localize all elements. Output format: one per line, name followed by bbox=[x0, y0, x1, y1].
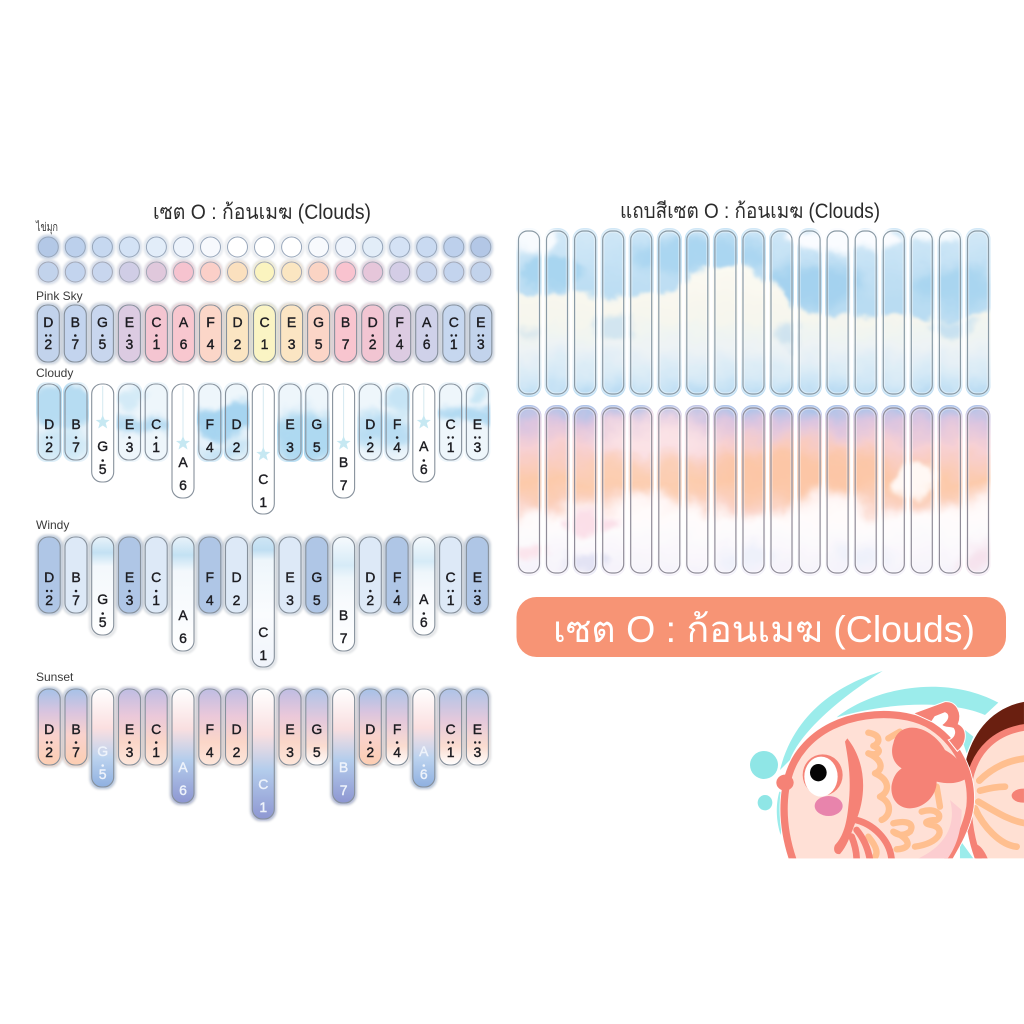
watercolor cloud texture bbox=[36, 382, 490, 462]
row: Sunset stickers: F bbox=[393, 721, 401, 737]
row: Cloudy stickers: C bbox=[151, 416, 161, 432]
illustration: goldfish bbox=[750, 671, 1024, 870]
row: Pink Sky stickers: 3 bbox=[288, 336, 296, 352]
row: Pink Sky stickers: 4 bbox=[207, 336, 215, 352]
row: Sunset stickers: 2 bbox=[366, 744, 374, 760]
row: Windy stickers: 3 bbox=[286, 592, 294, 608]
row: Pink Sky stickers: D bbox=[368, 314, 378, 330]
row: Sunset stickers: D bbox=[231, 721, 242, 737]
row: Pink Sky stickers: 3 bbox=[126, 336, 134, 352]
label: pearl: ไข่มุก bbox=[35, 220, 58, 235]
row: Cloudy stickers: F bbox=[393, 416, 401, 432]
row: Sunset stickers: 1 bbox=[152, 744, 160, 760]
row: Cloudy stickers: D bbox=[231, 416, 242, 432]
row: Cloudy stickers: E bbox=[285, 416, 295, 432]
body bbox=[780, 759, 975, 847]
row: Windy stickers: 2 bbox=[45, 592, 53, 608]
row: Windy stickers: 1 bbox=[152, 592, 160, 608]
row: Sunset stickers: E bbox=[125, 721, 134, 737]
row: Cloudy stickers: C bbox=[446, 416, 456, 432]
row: Pink Sky stickers: 5 bbox=[99, 336, 107, 352]
row: Windy stickers: E bbox=[473, 569, 482, 585]
row: Windy stickers: 3 bbox=[474, 592, 482, 608]
row: Sunset stickers: 3 bbox=[286, 744, 294, 760]
row: Pink Sky stickers: C bbox=[151, 314, 161, 330]
pectoral fin bbox=[852, 819, 892, 860]
row: Pink Sky stickers: 1 bbox=[261, 336, 269, 352]
title: left set: เซต O : ก้อนเมฆ (Clouds) bbox=[153, 201, 371, 224]
panel: blue cloud colour strips bbox=[516, 228, 990, 397]
row: Cloudy stickers: G bbox=[311, 416, 322, 432]
row: Pink Sky stickers: 1 bbox=[153, 336, 161, 352]
row: Sunset stickers: E bbox=[473, 721, 482, 737]
row: Windy stickers: F bbox=[393, 569, 401, 585]
row: Windy stickers: G bbox=[311, 569, 322, 585]
row: Cloudy stickers: B bbox=[339, 454, 348, 470]
row: Windy stickers: C bbox=[258, 624, 268, 640]
row: Cloudy stickers: D bbox=[44, 416, 54, 432]
row: Windy stickers: 6 bbox=[420, 614, 428, 630]
row: Cloudy stickers: C bbox=[258, 471, 268, 487]
row: Cloudy stickers: 4 bbox=[206, 439, 214, 455]
row: Sunset stickers: G bbox=[97, 743, 108, 759]
row: Pink Sky stickers: E bbox=[287, 314, 296, 330]
scales bbox=[868, 732, 940, 860]
nose bbox=[776, 775, 794, 791]
row: Sunset stickers: B bbox=[71, 721, 81, 737]
row: Cloudy stickers: 1 bbox=[152, 439, 160, 455]
row: Pink Sky stickers: 2 bbox=[369, 336, 377, 352]
banner: set name: เซต O : ก้อนเมฆ (Clouds) bbox=[553, 609, 975, 650]
row: Windy stickers: D bbox=[365, 569, 375, 585]
row: Sunset stickers: 1 bbox=[447, 744, 455, 760]
row: Sunset stickers: 2 bbox=[233, 744, 241, 760]
row: Windy stickers: E bbox=[125, 569, 134, 585]
row: Cloudy stickers: 7 bbox=[72, 439, 80, 455]
row: Windy stickers: D bbox=[44, 569, 54, 585]
row: Sunset stickers: 6 bbox=[179, 782, 187, 798]
row: Cloudy stickers: G bbox=[97, 438, 108, 454]
row: Pink Sky stickers bbox=[37, 305, 492, 362]
tail bbox=[966, 702, 1024, 768]
row: Windy stickers: 5 bbox=[99, 614, 107, 630]
row: Sunset stickers: A bbox=[178, 759, 188, 775]
outlines bbox=[518, 408, 988, 573]
row: Windy stickers: 4 bbox=[393, 592, 401, 608]
row: Windy stickers: C bbox=[151, 569, 161, 585]
crown blob bbox=[891, 728, 967, 808]
row: Sunset stickers: E bbox=[285, 721, 295, 737]
row: Cloudy stickers: B bbox=[71, 416, 81, 432]
row: Sunset stickers: 4 bbox=[206, 744, 214, 760]
banner: set name bbox=[516, 597, 1006, 657]
row: Windy stickers: A bbox=[419, 591, 429, 607]
row: Windy stickers: 7 bbox=[72, 592, 80, 608]
row: Sunset stickers: 1 bbox=[259, 799, 267, 815]
row: Cloudy stickers: 7 bbox=[340, 477, 348, 493]
row: Cloudy stickers: 3 bbox=[286, 439, 294, 455]
row: Pink Sky stickers: G bbox=[313, 314, 324, 330]
cheek bbox=[815, 796, 843, 816]
row: Windy stickers: D bbox=[231, 569, 242, 585]
row: Cloudy stickers: 1 bbox=[259, 494, 267, 510]
row: Windy stickers: B bbox=[71, 569, 81, 585]
row: Cloudy stickers: F bbox=[206, 416, 214, 432]
row: Windy stickers: 1 bbox=[447, 592, 455, 608]
row: Windy stickers: B bbox=[339, 607, 348, 623]
row: Cloudy stickers: 3 bbox=[126, 439, 134, 455]
row: Cloudy stickers: E bbox=[125, 416, 134, 432]
gill line bbox=[834, 738, 863, 854]
title: right strips: แถบสีเซต O : ก้อนเมฆ (Clouds) bbox=[620, 200, 880, 223]
row: Cloudy stickers: 2 bbox=[233, 439, 241, 455]
long tine fills and stars bbox=[96, 386, 431, 460]
row: Pink Sky stickers: D bbox=[232, 314, 243, 330]
row: Cloudy stickers: 2 bbox=[366, 439, 374, 455]
row: Sunset stickers: 2 bbox=[45, 744, 53, 760]
row: Cloudy stickers: 5 bbox=[99, 461, 107, 477]
row: Windy stickers: C bbox=[446, 569, 456, 585]
row: Cloudy stickers: E bbox=[473, 416, 482, 432]
row: Windy stickers: 7 bbox=[340, 630, 348, 646]
row: Pink Sky stickers: 2 bbox=[44, 336, 52, 352]
row: Sunset stickers: F bbox=[206, 721, 214, 737]
outlines bbox=[518, 231, 988, 394]
row: Windy stickers: E bbox=[285, 569, 295, 585]
row: Cloudy stickers: D bbox=[365, 416, 375, 432]
row: Pink Sky stickers: E bbox=[125, 314, 134, 330]
row: Sunset stickers: 7 bbox=[340, 782, 348, 798]
row: Pink Sky stickers: G bbox=[97, 314, 108, 330]
eye bbox=[803, 754, 843, 796]
row: Sunset stickers bbox=[38, 689, 488, 819]
row: Pink Sky stickers: E bbox=[476, 314, 485, 330]
row: Windy stickers: 5 bbox=[313, 592, 321, 608]
row: Pink Sky stickers: 1 bbox=[450, 336, 458, 352]
row: Pink Sky stickers: A bbox=[422, 314, 432, 330]
row: Windy stickers: 3 bbox=[126, 592, 134, 608]
row: Cloudy stickers: 2 bbox=[45, 439, 53, 455]
tine outlines bbox=[38, 384, 488, 514]
row: Pink Sky stickers: D bbox=[43, 314, 53, 330]
row: Pink Sky stickers: 5 bbox=[315, 336, 323, 352]
row: Sunset stickers: D bbox=[44, 721, 54, 737]
row: Sunset stickers: C bbox=[446, 721, 456, 737]
row: Windy stickers: 2 bbox=[233, 592, 241, 608]
row: Sunset stickers: A bbox=[419, 743, 429, 759]
row: Sunset stickers: 4 bbox=[393, 744, 401, 760]
row: Sunset stickers: 3 bbox=[474, 744, 482, 760]
row: Pink Sky stickers: 6 bbox=[423, 336, 431, 352]
row: Pink Sky stickers: 2 bbox=[234, 336, 242, 352]
pearl stickers, bottom row bbox=[38, 262, 491, 282]
row: Cloudy stickers: 1 bbox=[447, 439, 455, 455]
row: Cloudy stickers: 5 bbox=[313, 439, 321, 455]
row: Sunset stickers: D bbox=[365, 721, 375, 737]
row: Pink Sky stickers: F bbox=[395, 314, 404, 330]
row: Pink Sky stickers: 4 bbox=[396, 336, 404, 352]
row: Pink Sky stickers: C bbox=[259, 314, 270, 330]
row: Windy stickers: F bbox=[206, 569, 214, 585]
row: Windy stickers bbox=[38, 537, 488, 667]
row: Sunset stickers: C bbox=[258, 776, 268, 792]
row: Windy stickers: 6 bbox=[179, 630, 187, 646]
row: Pink Sky stickers: 6 bbox=[180, 336, 188, 352]
row: Sunset stickers: B bbox=[339, 759, 348, 775]
row: Pink Sky stickers: 7 bbox=[342, 336, 350, 352]
row: Windy stickers: 1 bbox=[259, 647, 267, 663]
row: Windy stickers: 2 bbox=[366, 592, 374, 608]
label: Cloudy: Cloudy bbox=[36, 366, 73, 380]
row: Pink Sky stickers: 3 bbox=[477, 336, 485, 352]
row: Windy stickers: 4 bbox=[206, 592, 214, 608]
row: Sunset stickers: G bbox=[311, 721, 322, 737]
row: Pink Sky stickers: B bbox=[71, 314, 80, 330]
row: Cloudy stickers: A bbox=[419, 438, 429, 454]
pearl stickers, top row bbox=[38, 237, 491, 257]
row: Sunset stickers: 5 bbox=[99, 766, 107, 782]
label: Windy: Windy bbox=[36, 518, 69, 532]
row: Pink Sky stickers: A bbox=[179, 314, 189, 330]
row: Cloudy stickers: A bbox=[178, 454, 188, 470]
row: Windy stickers: A bbox=[178, 607, 188, 623]
row: Windy stickers: G bbox=[97, 591, 108, 607]
row: Sunset stickers: 7 bbox=[72, 744, 80, 760]
label: Pink Sky: Pink Sky bbox=[36, 289, 83, 303]
label: Sunset: Sunset bbox=[36, 670, 74, 684]
row: Sunset stickers: C bbox=[151, 721, 161, 737]
row: Pink Sky stickers: C bbox=[449, 314, 459, 330]
row: Cloudy stickers bbox=[36, 382, 490, 514]
row: Sunset stickers: 5 bbox=[313, 744, 321, 760]
row: Cloudy stickers: 3 bbox=[474, 439, 482, 455]
panel: sunset cloud colour strips bbox=[516, 405, 990, 576]
row: Pink Sky stickers: 7 bbox=[71, 336, 79, 352]
row: Cloudy stickers: 4 bbox=[393, 439, 401, 455]
row: Cloudy stickers: 6 bbox=[420, 461, 428, 477]
row: Pink Sky stickers: B bbox=[341, 314, 350, 330]
dorsal fin bbox=[913, 702, 965, 751]
row: Pink Sky stickers: F bbox=[206, 314, 215, 330]
row: Sunset stickers: 3 bbox=[126, 744, 134, 760]
row: Sunset stickers: 6 bbox=[420, 766, 428, 782]
row: Cloudy stickers: 6 bbox=[179, 477, 187, 493]
